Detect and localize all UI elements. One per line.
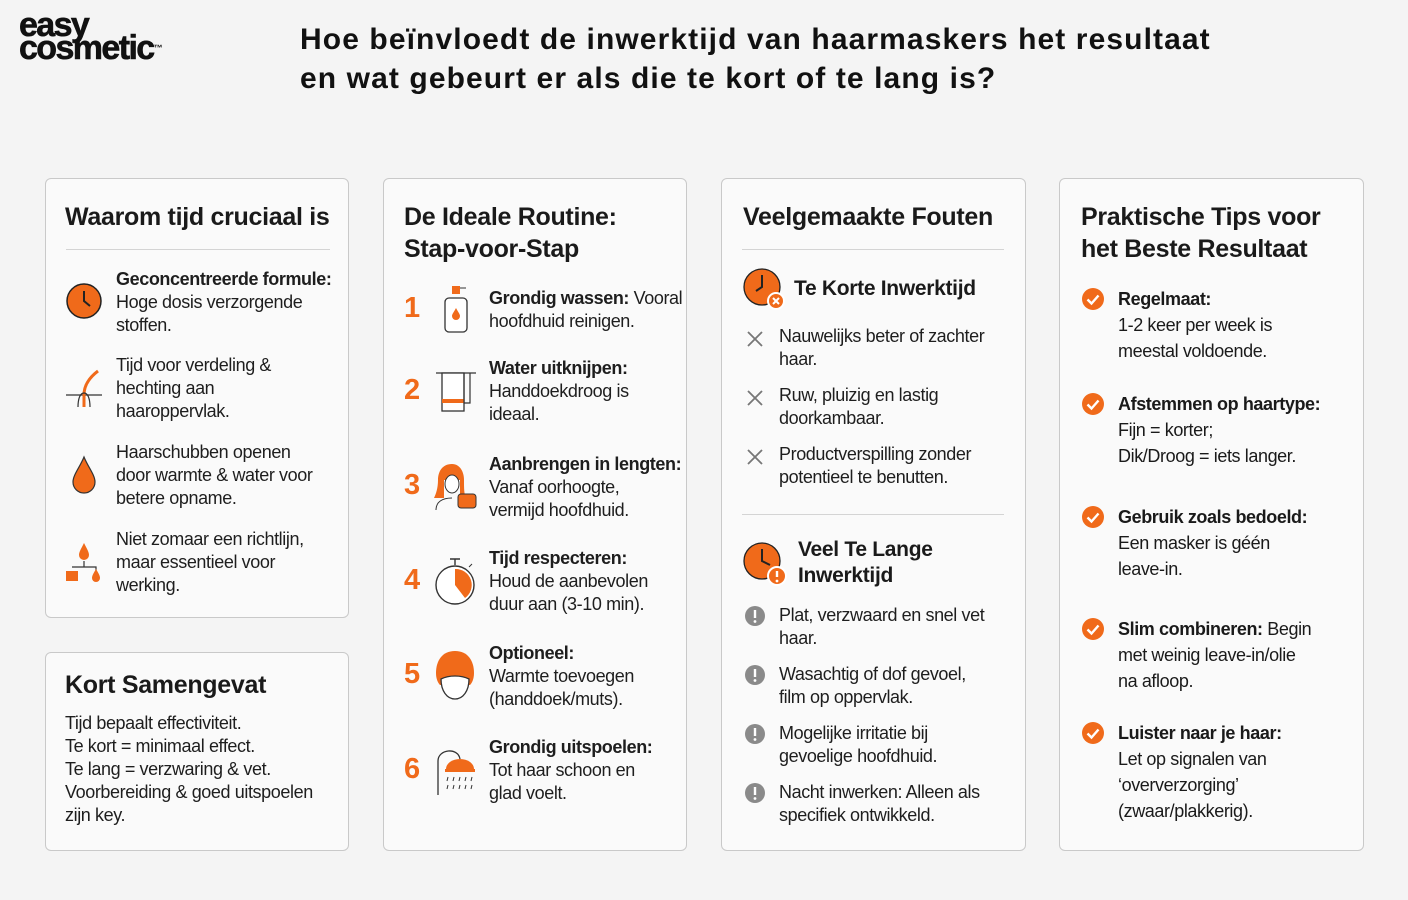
heading: De Ideale Routine: xyxy=(404,203,617,231)
tip 5: ‘oververzorging’ xyxy=(1118,775,1239,795)
tip 2 xyxy=(1082,393,1320,466)
step 3 xyxy=(404,454,681,520)
step 4: 4 xyxy=(404,564,420,596)
tip 5: Luister naar je haar: xyxy=(1118,723,1282,743)
step 3: Aanbrengen in lengten: xyxy=(489,454,681,474)
text: verdeling: haaroppervlak. xyxy=(116,401,229,421)
step 6: glad voelt. xyxy=(489,783,567,803)
text: verdeling xyxy=(116,355,272,421)
step 1 xyxy=(404,286,682,333)
heading: Waarom tijd cruciaal is xyxy=(65,203,330,231)
list: te lang effects: haar. xyxy=(779,628,817,648)
heading: het Beste Resultaat xyxy=(1081,235,1307,263)
tip 1: Regelmaat: xyxy=(1118,289,1211,309)
list: te lang effects: gevoelige hoofdhuid. xyxy=(779,746,937,766)
heading xyxy=(1081,203,1320,263)
heading: Kort Samengevat xyxy=(65,671,266,699)
subheading: te kort: Te Korte Inwerktijd xyxy=(794,277,976,300)
step 4: Houd de aanbevolen xyxy=(489,571,648,591)
logo: easy xyxy=(19,6,88,44)
tip 1: 1-2 keer per week is xyxy=(1118,315,1272,335)
tip 4: Slim combineren: Begin xyxy=(1118,619,1311,639)
step 1: hoofdhuid reinigen. xyxy=(489,311,635,331)
text: richtlijn: maar essentieel voor xyxy=(116,552,275,572)
step 2 xyxy=(404,358,629,424)
heading: Praktische Tips voor xyxy=(1081,203,1320,231)
step 4: duur aan (3-10 min). xyxy=(489,594,644,614)
text: summary: zijn key. xyxy=(65,805,125,825)
list: te kort effects: doorkambaar. xyxy=(779,408,884,428)
list: te kort effects: Ruw, pluizig en lastig xyxy=(779,385,938,405)
logo: cosmetic™ xyxy=(19,29,163,67)
text: richtlijn: Niet zomaar een richtlijn, xyxy=(116,529,304,549)
panel: veelgemaakte fouten xyxy=(721,178,1026,851)
text: haarschubben: betere opname. xyxy=(116,488,236,508)
text: geconcentreerde formule: stoffen. xyxy=(116,315,172,335)
step 2: ideaal. xyxy=(489,404,539,424)
step 5 xyxy=(404,643,634,709)
tip 5: Let op signalen van xyxy=(1118,749,1267,769)
list: te kort effects: Nauwelijks beter of zachter xyxy=(779,326,984,346)
tip 5: (zwaar/plakkerig). xyxy=(1118,801,1253,821)
list: te lang effects: film op oppervlak. xyxy=(779,687,913,707)
tip 2: Dik/Droog = iets langer. xyxy=(1118,446,1296,466)
step 1: Grondig wassen: Vooral xyxy=(489,288,682,308)
step 1: 1 xyxy=(404,292,420,324)
step 6: Grondig uitspoelen: xyxy=(489,737,652,757)
tip 1: meestal voldoende. xyxy=(1118,341,1267,361)
subheading: te lang: Inwerktijd xyxy=(798,564,893,587)
text: verdeling: Tijd voor verdeling & xyxy=(116,355,271,375)
text: summary xyxy=(65,713,313,825)
text: haarschubben: door warmte & water voor xyxy=(116,465,312,485)
list: te lang effects: Nacht inwerken: Alleen als xyxy=(779,782,980,802)
step 6: Tot haar schoon en xyxy=(489,760,635,780)
tip 4: met weinig leave-in/olie xyxy=(1118,645,1296,665)
step 5: Warmte toevoegen xyxy=(489,666,634,686)
heading: Veelgemaakte Fouten xyxy=(743,203,993,231)
text: richtlijn xyxy=(116,529,304,595)
list: te kort effects: haar. xyxy=(779,349,817,369)
step 4: Tijd respecteren: xyxy=(489,548,627,568)
subheading: te kort xyxy=(743,268,976,308)
heading xyxy=(404,203,617,263)
icon: drop xyxy=(72,456,96,494)
list: te lang effects: Mogelijke irritatie bij xyxy=(779,723,928,743)
list: te lang effects: specifiek ontwikkeld. xyxy=(779,805,935,825)
tip 4: na afloop. xyxy=(1118,671,1193,691)
list: te kort effects: Productverspilling zonder xyxy=(779,444,971,464)
text: geconcentreerde formule: Geconcentreerde formule: xyxy=(116,269,331,289)
tip 2: Afstemmen op haartype: xyxy=(1118,394,1320,414)
logo xyxy=(19,6,163,67)
text: summary: Voorbereiding & goed uitspoelen xyxy=(65,782,313,802)
subheading: te lang xyxy=(743,538,933,587)
panel: praktische tips: leave-in. xyxy=(1118,559,1182,579)
text: haarschubben xyxy=(116,442,313,508)
panel: ideale routine xyxy=(383,178,687,851)
step 5: Optioneel: xyxy=(489,643,574,663)
icon: hair strand xyxy=(66,370,102,407)
icon: drops xyxy=(66,543,100,582)
text: haarschubben: Haarschubben openen xyxy=(116,442,291,462)
title: Hoe beïnvloedt de inwerktijd van haarmaskers het resultaat xyxy=(300,23,1211,56)
icon: clock xyxy=(66,283,102,319)
text: summary: Te lang = verzwaring & vet. xyxy=(65,759,271,779)
list: te kort effects: potentieel te benutten. xyxy=(779,467,948,487)
step 6 xyxy=(404,737,652,803)
panel: praktische tips xyxy=(1059,178,1364,851)
text: summary: Te kort = minimaal effect. xyxy=(65,736,255,756)
tip 3: Een masker is géén xyxy=(1118,533,1270,553)
subheading: te lang: Veel Te Lange xyxy=(798,538,933,561)
step 3: vermijd hoofdhuid. xyxy=(489,500,629,520)
list: te kort effects xyxy=(747,326,984,487)
text: geconcentreerde formule xyxy=(116,269,331,335)
step 2: Handdoekdroog is xyxy=(489,381,629,401)
panel: waarom tijd cruciaal is xyxy=(45,178,349,618)
tip 4 xyxy=(1082,618,1311,691)
step 5: 5 xyxy=(404,658,420,690)
text: richtlijn: werking. xyxy=(116,575,180,595)
text: summary: Tijd bepaalt effectiviteit. xyxy=(65,713,241,733)
step 2: Water uitknijpen: xyxy=(489,358,628,378)
title xyxy=(300,23,1211,95)
title: en wat gebeurt er als die te kort of te lang is? xyxy=(300,62,996,95)
step 4 xyxy=(404,548,648,614)
step 2: 2 xyxy=(404,374,420,406)
list: te lang effects: Plat, verzwaard en snel vet xyxy=(779,605,984,625)
step 6: 6 xyxy=(404,753,420,785)
list: te lang effects xyxy=(745,605,985,825)
tip 3 xyxy=(1082,506,1307,579)
tip 3: Gebruik zoals bedoeld: xyxy=(1118,507,1307,527)
panel: kort samengevat xyxy=(45,652,349,851)
heading: Stap-voor-Stap xyxy=(404,235,579,263)
tip 2: Fijn = korter; xyxy=(1118,420,1213,440)
list: te lang effects: Wasachtig of dof gevoel, xyxy=(779,664,966,684)
tip 5 xyxy=(1082,722,1282,821)
text: geconcentreerde formule: Hoge dosis verzorgende xyxy=(116,292,302,312)
tip 1 xyxy=(1082,288,1272,361)
text: verdeling: hechting aan xyxy=(116,378,214,398)
step 5: (handdoek/muts). xyxy=(489,689,623,709)
step 3: 3 xyxy=(404,469,420,501)
step 3: Vanaf oorhoogte, xyxy=(489,477,619,497)
